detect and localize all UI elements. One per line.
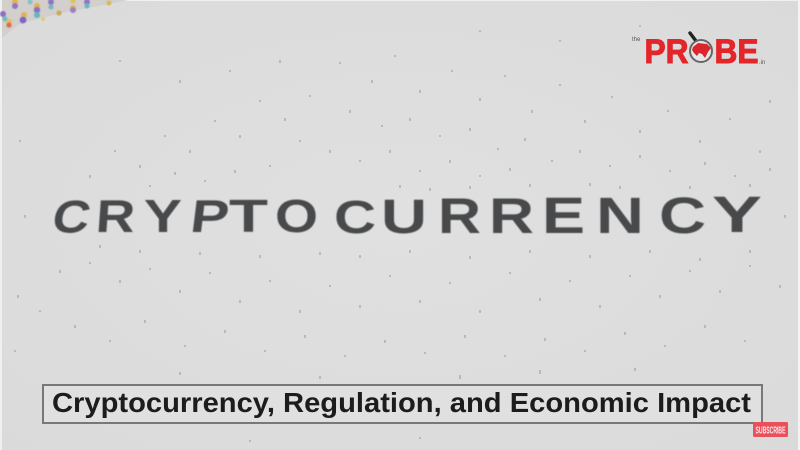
logo: the PROBE.in: the <box>632 37 641 43</box>
heading: CRYPTOCURRENCY: Y <box>144 190 182 242</box>
heading: CRYPTOCURRENCY: R <box>438 189 481 244</box>
heading: CRYPTOCURRENCY: R <box>94 190 137 242</box>
heading: CRYPTOCURRENCY <box>48 187 762 245</box>
heading: CRYPTOCURRENCY: C <box>659 188 706 245</box>
icon: magnifying glass with map <box>690 33 712 62</box>
heading: CRYPTOCURRENCY: E <box>542 188 585 245</box>
heading: CRYPTOCURRENCY: O <box>275 190 318 242</box>
heading: CRYPTOCURRENCY: C <box>334 191 376 243</box>
heading: CRYPTOCURRENCY: C <box>48 191 95 242</box>
caption text: Cryptocurrency, Regulation, and Economic Impact <box>52 387 751 418</box>
logo: the PROBE.in <box>632 33 765 71</box>
logo: the PROBE.in: BE <box>714 33 758 71</box>
heading: CRYPTOCURRENCY: R <box>489 189 534 244</box>
heading: CRYPTOCURRENCY: T <box>229 190 268 242</box>
subscribe button <box>753 422 788 437</box>
heading: CRYPTOCURRENCY: P <box>188 190 232 242</box>
heading: CRYPTOCURRENCY: Y <box>712 187 762 244</box>
logo: the PROBE.in: .in <box>759 60 765 66</box>
caption box <box>43 385 762 423</box>
heading: CRYPTOCURRENCY: N <box>596 188 644 245</box>
decorative coloured dots, top-left corner <box>0 0 128 38</box>
logo: the PROBE.in: PR <box>644 33 688 71</box>
heading: CRYPTOCURRENCY: U <box>381 189 427 243</box>
